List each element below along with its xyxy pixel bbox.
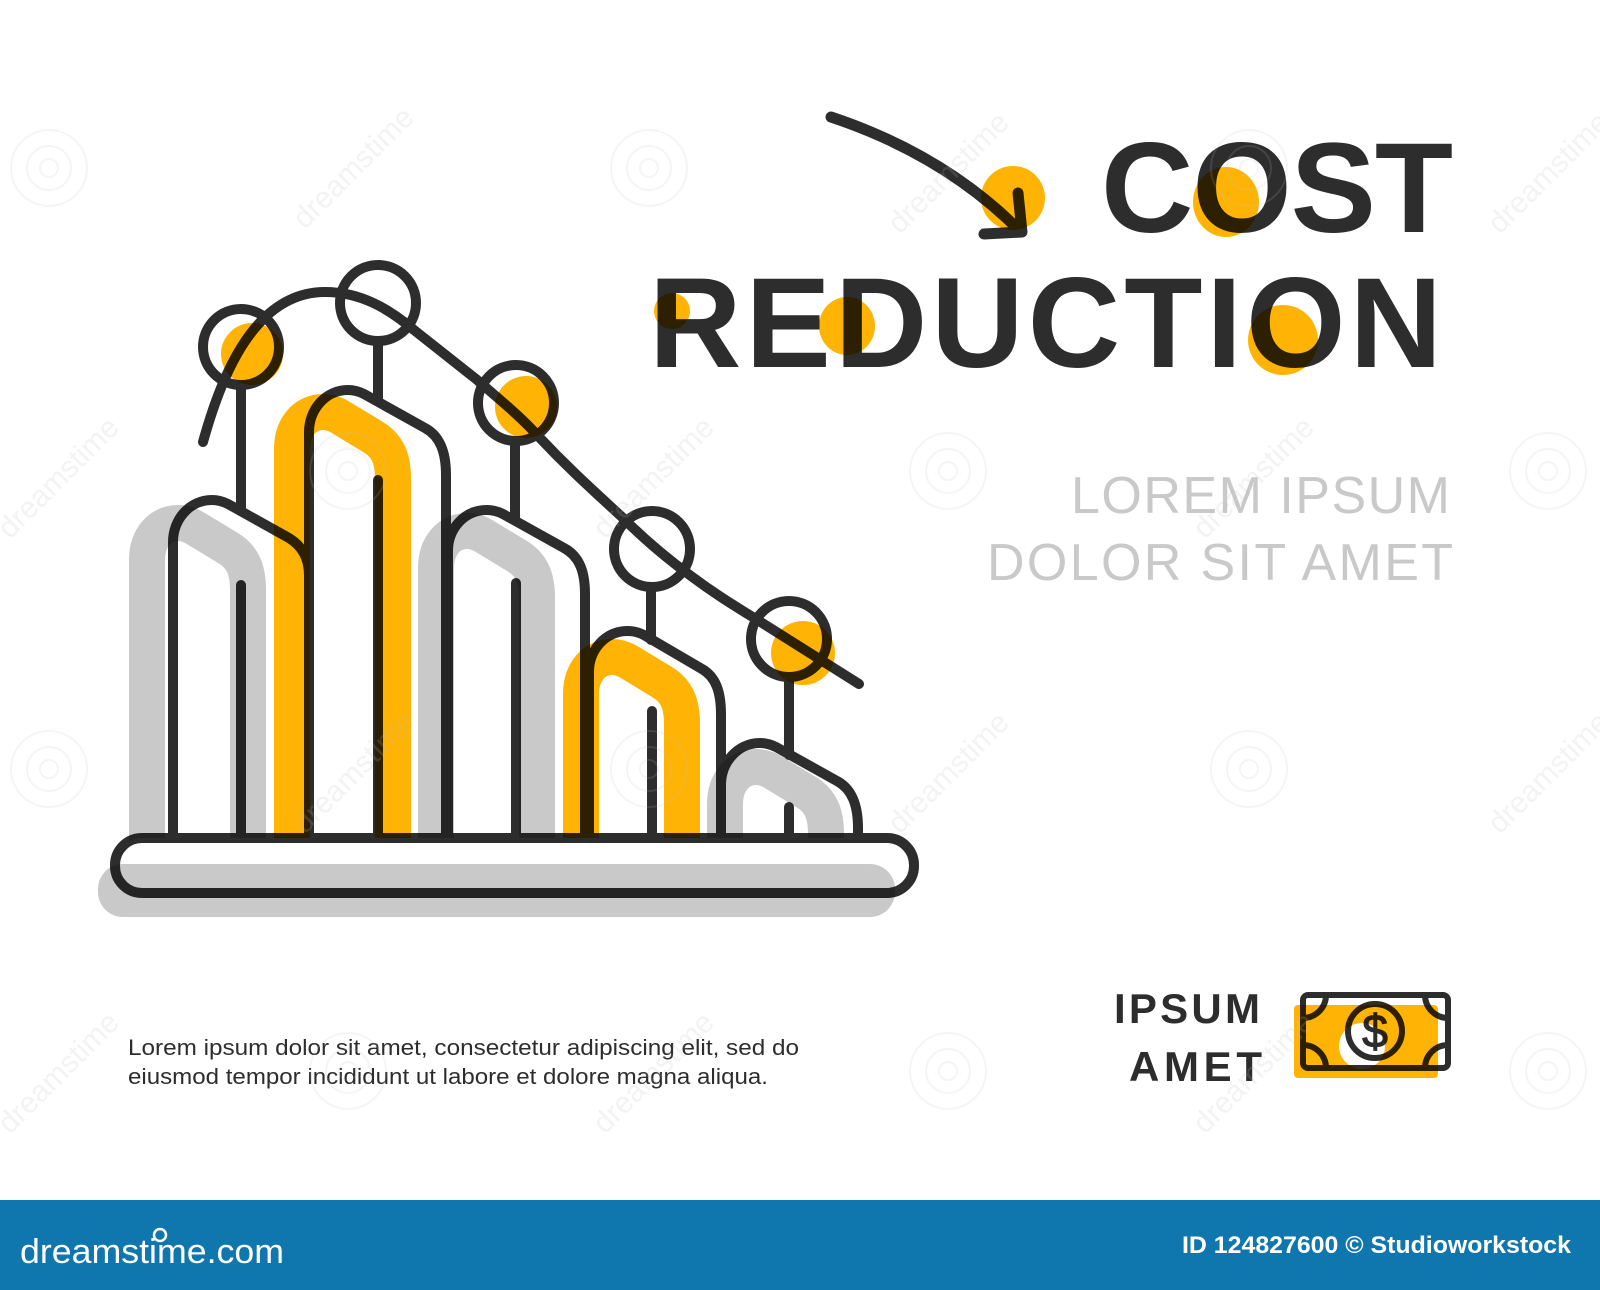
ribbon: bar 2 orange — [292, 412, 393, 841]
watermark text: dreamstime — [882, 106, 1016, 240]
banknote white highlight — [1339, 1023, 1385, 1069]
base outline — [115, 838, 914, 893]
note corners — [1303, 995, 1448, 1068]
blob: O of REDUCTION — [1248, 305, 1318, 375]
ribbon: bar 3 gray — [436, 531, 537, 841]
footer credit: ID 124827600 © Studioworkstock — [1182, 1232, 1572, 1259]
footer background — [0, 1200, 1600, 1290]
title line 1: COST — [1101, 117, 1453, 260]
banknote outline — [1303, 995, 1448, 1068]
watermark swirls — [11, 130, 1586, 1109]
orange dots behind circles — [221, 323, 835, 685]
subtitle line 1: LOREM IPSUM — [1071, 467, 1450, 525]
banknote orange fill — [1294, 1005, 1438, 1078]
subtitle — [987, 467, 1453, 592]
title — [649, 117, 1453, 395]
icon: dollar banknote — [1294, 995, 1448, 1078]
bar 4 outline — [589, 631, 721, 838]
base fill — [115, 838, 914, 893]
title blobs — [654, 166, 1318, 375]
coin ring — [1348, 1004, 1402, 1058]
marker 2 — [340, 265, 416, 341]
blob: arrow target — [981, 166, 1045, 230]
description text — [128, 1035, 799, 1089]
marker 5 — [751, 601, 827, 677]
blob: D — [819, 297, 875, 355]
marker 3 — [478, 365, 554, 441]
arrow shaft — [831, 117, 1021, 232]
watermark text: dreamstime — [1187, 1006, 1321, 1140]
footer bar — [0, 1200, 1600, 1290]
watermark text: dreamstime — [587, 1006, 721, 1140]
subtitle line 2: DOLOR SIT AMET — [987, 534, 1453, 592]
marker 4 — [614, 511, 690, 587]
bar 2 outline — [309, 390, 446, 838]
outlines — [115, 265, 914, 893]
bar 1 outline — [173, 500, 309, 838]
marker circles — [203, 265, 827, 677]
dot: marker 5 — [771, 621, 835, 685]
base platform — [98, 838, 914, 917]
bar chart illustration — [98, 265, 914, 917]
description line 2: eiusmod tempor incididunt ut labore et dolore magna aliqua. — [128, 1064, 768, 1089]
footer logo text: dreamstime.com — [20, 1233, 284, 1271]
arrow head — [984, 193, 1022, 234]
trend curve — [203, 292, 859, 684]
bar 5 outline — [721, 743, 858, 838]
blob: R — [654, 293, 690, 329]
marker 1 — [203, 309, 279, 385]
stems from markers to bars — [241, 343, 789, 755]
bar 3 outline — [448, 510, 585, 838]
ribbon: bar 1 gray — [147, 523, 248, 841]
watermark text: dreamstime — [882, 706, 1016, 840]
bar inner lines — [241, 480, 789, 838]
description line 1: Lorem ipsum dolor sit amet, consectetur adipiscing elit, sed do — [128, 1035, 799, 1060]
footer logo swirl — [154, 1229, 166, 1241]
dot: marker 3 — [495, 376, 557, 438]
label line 2: AMET — [1129, 1043, 1262, 1090]
dot: marker 1 — [221, 323, 283, 385]
title line 2: REDUCTION — [649, 252, 1442, 395]
money label — [1114, 985, 1262, 1090]
ribbon: bar 4 orange — [581, 657, 682, 841]
note border — [1303, 995, 1448, 1068]
arrow — [831, 117, 1022, 234]
dollar sign: $ — [1362, 1005, 1388, 1057]
watermark text: dreamstime — [287, 706, 421, 840]
ribbon: bar 5 gray — [725, 767, 826, 841]
watermark text: dreamstime — [587, 411, 721, 545]
label line 1: IPSUM — [1114, 985, 1260, 1032]
watermark text: dreamstime — [287, 101, 421, 235]
base gray shadow — [98, 864, 895, 917]
colored ribbons behind bars — [147, 412, 826, 841]
watermark text: dreamstime — [1187, 411, 1321, 545]
blob: O of COST — [1193, 167, 1259, 237]
